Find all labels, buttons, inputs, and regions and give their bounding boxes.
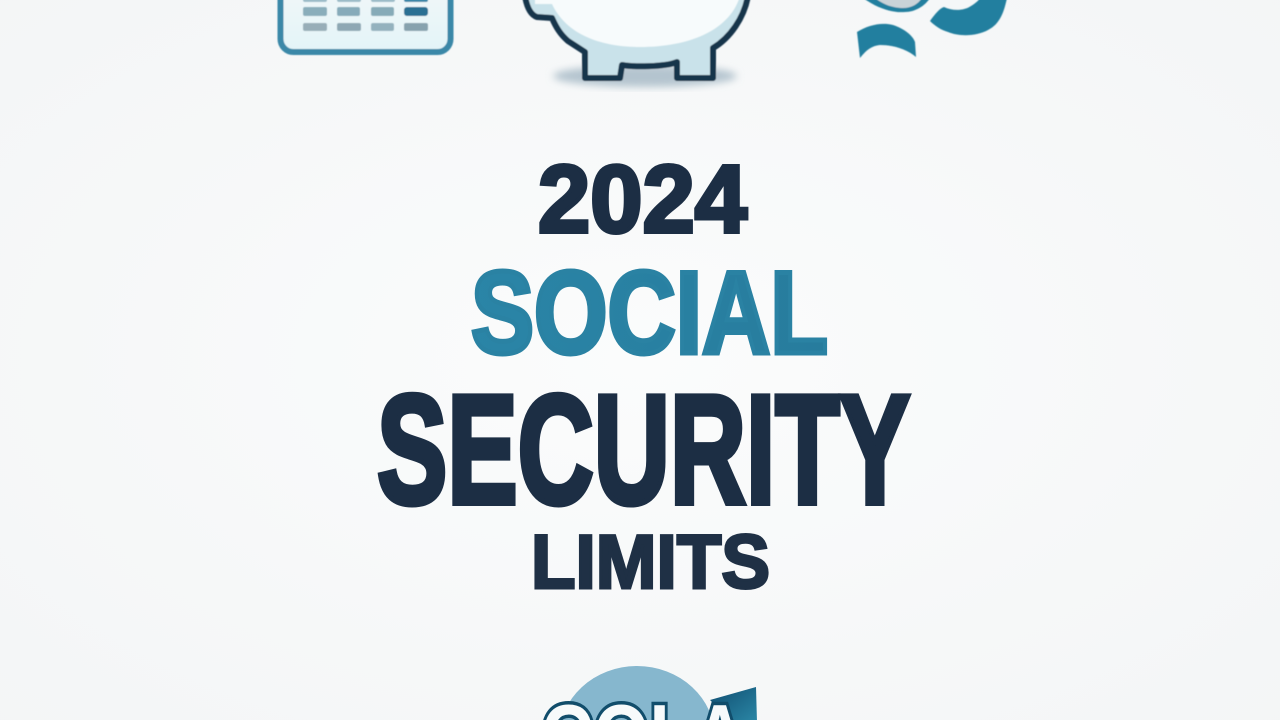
title: SECURITY: SECURITY — [377, 363, 910, 536]
title: SOCIAL: SOCIAL — [471, 247, 828, 378]
icon: people arcs — [857, 0, 1007, 58]
badge arrow — [710, 687, 757, 720]
title: LIMITS: LIMITS — [531, 520, 770, 605]
badge circle — [559, 666, 715, 720]
icon: calendar — [280, 0, 450, 52]
icon: piggy bank — [525, 0, 748, 87]
icon: COLA badge — [541, 666, 757, 720]
title: 2024: 2024 — [538, 146, 747, 253]
